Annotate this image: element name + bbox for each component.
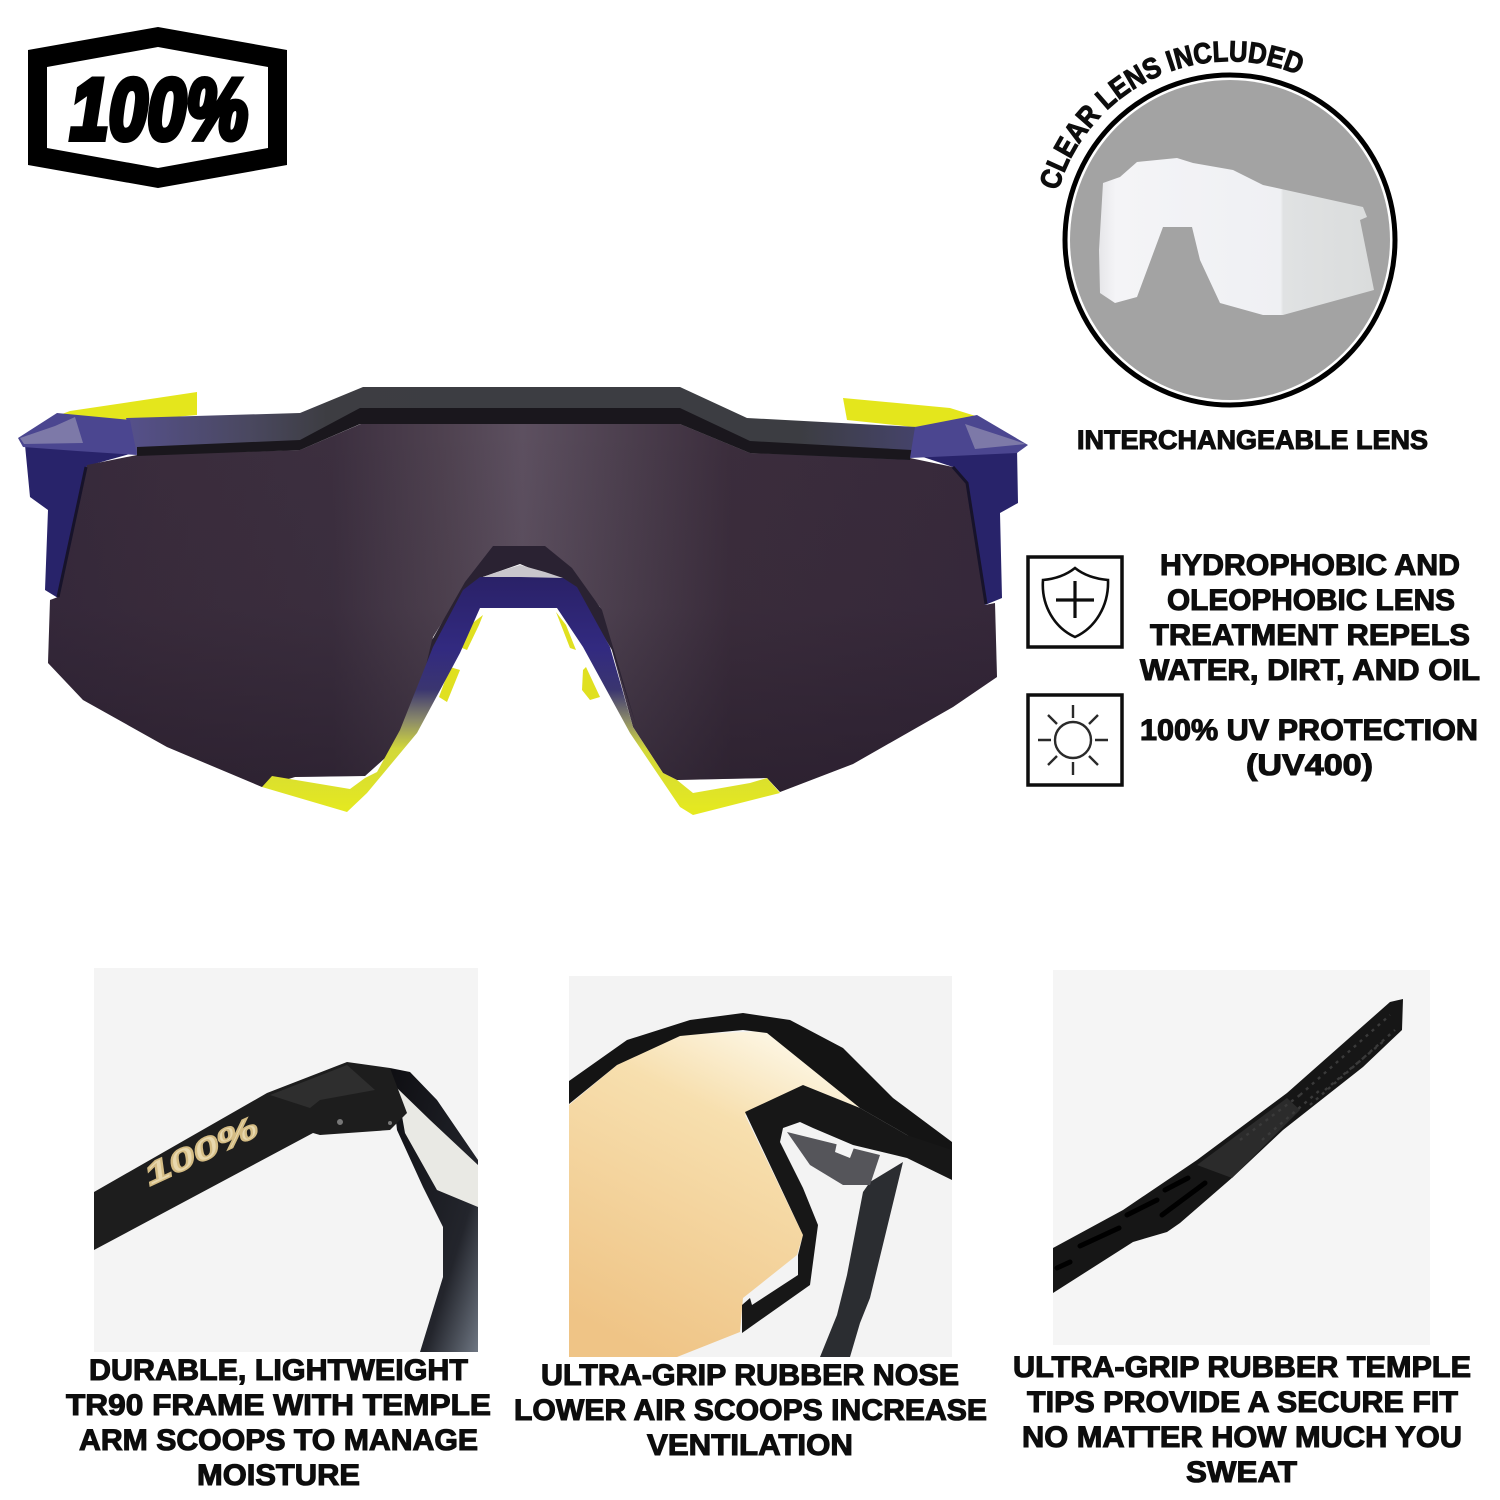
top frame matte band [126,387,917,460]
caption: ULTRA-GRIP RUBBER TEMPLE [1013,1351,1471,1384]
caption: TR90 FRAME WITH TEMPLE [66,1389,491,1422]
temple inner dark edge [58,467,986,604]
temple arm behind [820,1162,903,1357]
caption: SWEAT [1186,1456,1297,1489]
feature text [1140,549,1480,687]
photo background [1053,970,1430,1345]
feature text: 100% UV PROTECTION [1140,714,1478,747]
panel: temple tip detail [1013,970,1471,1489]
gold lens [569,1031,860,1357]
yellow nose pads [439,612,600,702]
brand logo: 100% [28,27,287,188]
arm lit facet [270,1065,375,1108]
panel: TR90 frame detail [66,968,491,1492]
lens circle [1065,75,1395,405]
feature: hydrophobic lens treatment [1028,549,1480,687]
purple temple pieces [25,445,1018,605]
temple arm [94,1062,407,1250]
hinge screws [337,1119,392,1125]
top frame arc [569,1013,952,1158]
clear lens shape [1099,158,1374,315]
caption: LOWER AIR SCOOPS INCREASE [514,1394,987,1427]
caption [66,1354,491,1492]
grey rubber nose pad [787,1132,880,1185]
feature text: HYDROPHOBIC AND [1160,549,1460,582]
feature: UV protection [1028,695,1478,785]
pad window [835,1138,855,1158]
photo background [94,968,478,1352]
caption: NO MATTER HOW MUCH YOU [1022,1421,1462,1454]
caption: VENTILATION [647,1429,853,1462]
lens and frame behind [390,1068,478,1352]
yellow temple tips behind frame [57,392,982,428]
panel: interchangeable clear lens [1040,40,1428,455]
caption: MOISTURE [197,1459,360,1492]
caption: TIPS PROVIDE A SECURE FIT [1027,1386,1458,1419]
frame under-edge [137,408,912,460]
rubber temple tip [1053,999,1403,1293]
feature text [1140,714,1478,782]
smooth facet [1197,1098,1300,1178]
brow highlights [20,417,83,444]
nose opening highlight [480,565,563,578]
panel: rubber nose detail [514,976,987,1462]
lens caption: INTERCHANGEABLE LENS [1077,425,1428,455]
dark sunglass lens [48,423,997,792]
nose bridge shadow band [412,546,636,725]
nose piece with purple to yellow fade [262,577,780,815]
lens lower shading [48,423,997,792]
grip slots [1057,1178,1205,1268]
feature text: TREATMENT REPELS [1150,619,1470,652]
feature text: OLEOPHOBIC LENS [1167,584,1455,617]
icon: sun [1028,695,1122,785]
caption: ARM SCOOPS TO MANAGE [79,1424,478,1457]
caption: ULTRA-GRIP RUBBER NOSE [541,1359,959,1392]
caption: DURABLE, LIGHTWEIGHT [89,1354,468,1387]
icon: shield [1028,557,1122,647]
photo background [569,976,952,1357]
brand logo: 100%: 100% [70,62,248,158]
nose frame [742,1085,952,1333]
main product image: sunglasses front view [18,387,1028,815]
feature text: (UV400) [1246,749,1373,782]
arm logo: 100% [139,1111,264,1192]
left purple brow [18,413,137,455]
right purple brow [910,415,1028,458]
caption [514,1359,987,1462]
white lens sheen [397,1088,478,1207]
curved heading: CLEAR LENS INCLUDED [1040,40,1303,188]
feature text: WATER, DIRT, AND OIL [1140,654,1480,687]
grip texture dots [1240,1015,1395,1140]
caption [1013,1351,1471,1489]
